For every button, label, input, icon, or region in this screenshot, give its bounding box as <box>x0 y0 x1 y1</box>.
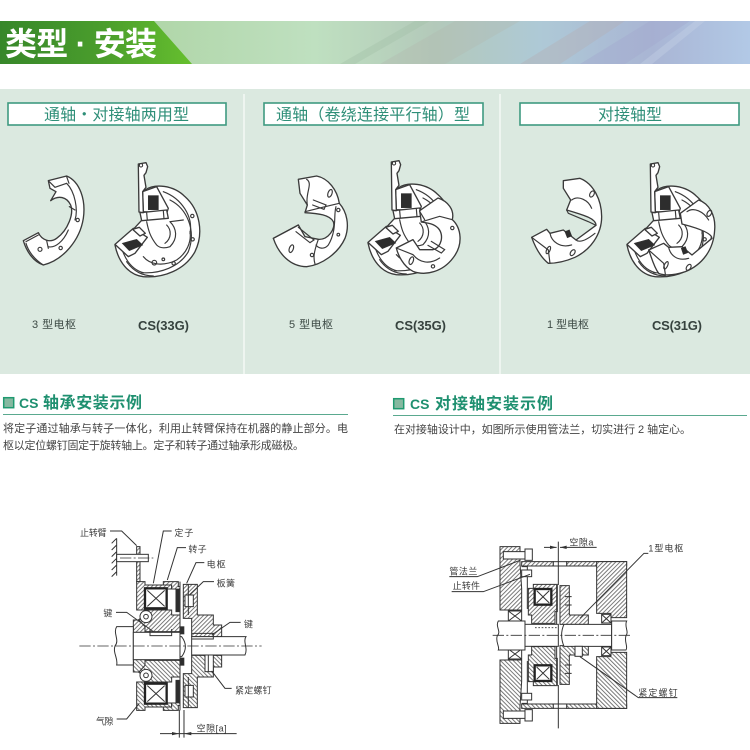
text block: bearing mounting description: 将定子通过轴承与转子一体化，利用止转臂保持在机器的静止部分。电 <box>3 421 348 435</box>
labels and leaders: 键 <box>244 618 253 629</box>
mirrored half: upper and lower clutch body <box>133 582 222 710</box>
icon: CS 33G clutch <box>115 163 200 277</box>
labels and leaders: 管法兰 <box>449 565 477 576</box>
heading: shaft and butt type: 通轴・对接轴两用型 <box>44 106 189 124</box>
section heading: butt shaft mounting example <box>393 395 747 416</box>
caption: type 1 armature: 1 型电枢 <box>547 317 589 331</box>
labels and leaders: 紧定螺钉 <box>235 684 272 695</box>
section heading: butt shaft mounting example: 对接轴安装示例 <box>435 395 553 413</box>
heading: butt shaft type <box>520 103 739 125</box>
panel: product types <box>0 89 750 374</box>
gap dimension: 空隙[a] <box>197 723 227 734</box>
caption: type 3 armature: 3 型电枢 <box>32 317 76 331</box>
shafts <box>497 621 627 656</box>
labels and leaders <box>449 543 683 698</box>
labels and leaders: 定子 <box>174 527 193 538</box>
heading: butt shaft type: 对接轴型 <box>598 106 662 124</box>
section heading: bearing mounting example: 轴承安装示例 <box>43 394 142 412</box>
text block: butt shaft mounting description: 在对接轴设计中，如图所示使用管法兰，切实进行 2 轴定心。 <box>394 422 691 436</box>
heading: shaft and butt type <box>8 103 226 125</box>
labels and leaders: 键 <box>103 608 112 619</box>
mirrored half: housing and clutch <box>500 542 627 728</box>
labels and leaders: 板簧 <box>217 578 235 589</box>
text block: bearing mounting description <box>3 421 348 452</box>
caption: type 5 armature: 5 型电枢 <box>289 317 333 331</box>
section heading: bearing mounting example <box>3 394 348 415</box>
labels and leaders: 止转臂 <box>80 527 107 538</box>
caption: CS 33G: CS(33G) <box>138 318 189 333</box>
icon: CS 35G clutch <box>368 161 460 275</box>
labels and leaders: 止转件 <box>453 580 480 591</box>
centre line <box>493 634 631 637</box>
text block: bearing mounting description: 枢以定位螺钉固定于旋转轴上。定子和转子通过轴承形成磁极。 <box>3 438 304 452</box>
gap dimension <box>544 537 597 549</box>
labels and leaders: 紧定螺钉 <box>638 687 678 698</box>
heading: through shaft type <box>264 103 483 125</box>
caption: CS 35G: CS(35G) <box>395 318 446 333</box>
wall and stop pin <box>112 538 153 577</box>
icon: CS 31G clutch <box>627 163 715 277</box>
gap dimension: 空隙a <box>569 537 593 548</box>
labels and leaders: 气隙 <box>96 715 113 726</box>
icon: type 1 armature <box>532 178 602 263</box>
labels and leaders <box>80 527 272 726</box>
labels and leaders: 1型电枢 <box>648 543 683 554</box>
title: 类型·安装 <box>0 21 192 64</box>
icon: type 5 armature <box>273 176 347 267</box>
diagram: bearing mounting cross-section <box>79 527 272 738</box>
labels and leaders: 电枢 <box>207 558 226 569</box>
centre line <box>79 645 262 647</box>
caption: CS 31G: CS(31G) <box>652 318 702 333</box>
gap dimension <box>160 710 237 738</box>
shafts <box>114 627 246 672</box>
stop arm <box>137 547 140 582</box>
section heading: butt shaft mounting example: CS <box>410 396 429 412</box>
section heading: bearing mounting example: CS <box>19 395 38 411</box>
banner background <box>0 21 750 64</box>
icon: type 3 armature <box>23 176 84 265</box>
title: 类型·安装: 类型 · 安装 <box>5 26 157 62</box>
labels and leaders: 转子 <box>188 544 207 555</box>
heading: through shaft type: 通轴（卷绕连接平行轴）型 <box>276 106 470 124</box>
diagram: butt shaft mounting cross-section <box>449 537 683 728</box>
